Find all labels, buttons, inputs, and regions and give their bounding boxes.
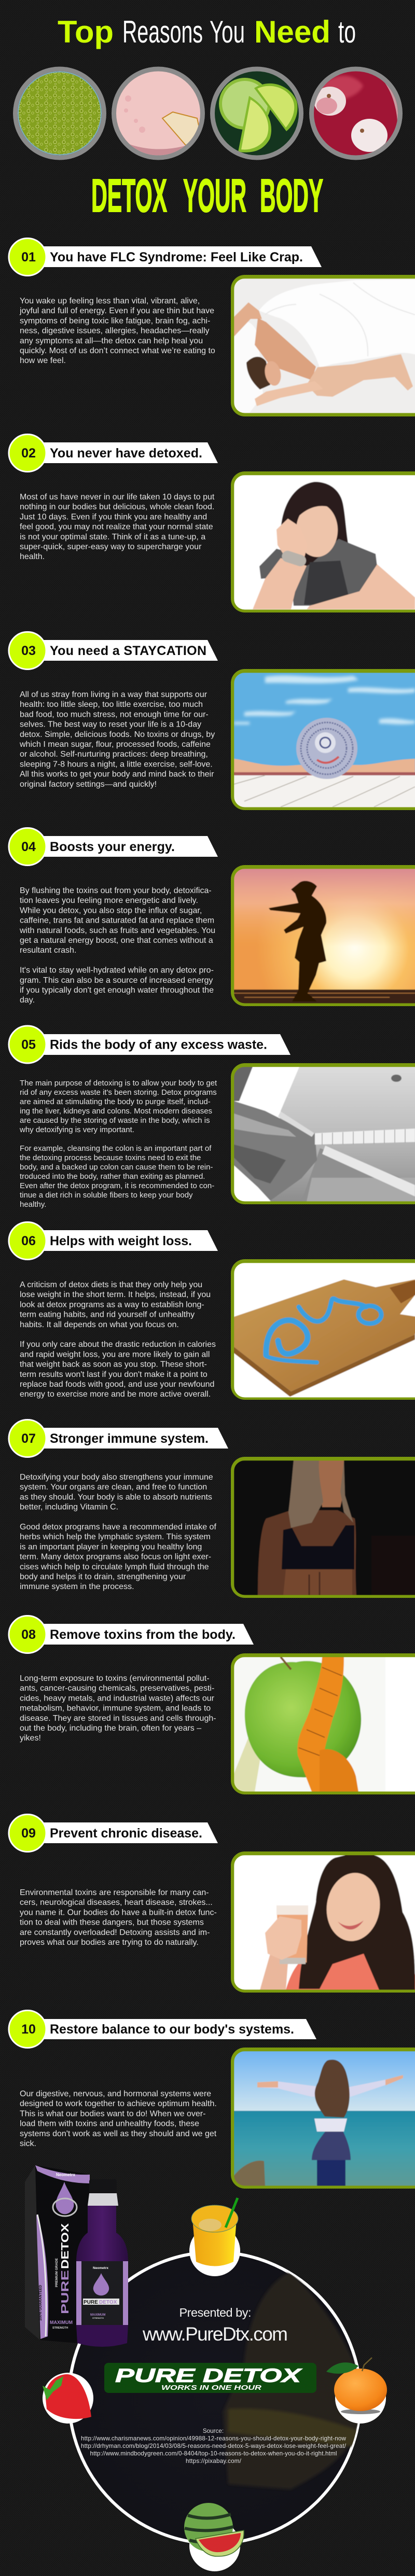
icon: strawberry bbox=[43, 2373, 93, 2424]
text 05: healthy. bbox=[20, 1200, 46, 1209]
text 04: It's vital to stay well-hydrated while on any detox pro- bbox=[20, 966, 214, 975]
box: PREMIUM GRADE bbox=[55, 2258, 59, 2287]
text 09: you name it. Our bodies do have a built-in detox func- bbox=[20, 1908, 217, 1917]
logo: pure detox: WORKS IN ONE HOUR bbox=[161, 2384, 262, 2391]
text 02 bbox=[20, 493, 215, 561]
photo: measuring tape around waist bbox=[231, 1063, 415, 1204]
heading 02: You never have detoxed. bbox=[50, 446, 202, 461]
text 01: joyful and full of energy. Even if you are thin but have bbox=[19, 307, 214, 315]
text 07 bbox=[20, 1473, 216, 1591]
faded lemon backdrop bbox=[223, 2272, 363, 2489]
text 07: body and helps it to drain, strengthening your bbox=[20, 1572, 186, 1581]
sources: https://pixabay.com/ bbox=[186, 2458, 242, 2464]
title: top reasons: Top bbox=[58, 15, 114, 49]
photo: woman sleeping under a duvet bbox=[231, 275, 415, 416]
text 02: feel good, you may not realize that your normal state bbox=[20, 523, 213, 532]
icon: orange bbox=[326, 2358, 387, 2424]
text 03 bbox=[19, 690, 215, 789]
title: top reasons bbox=[58, 15, 356, 49]
title: top reasons: to bbox=[338, 15, 356, 49]
heading 10: Restore balance to our body's systems. bbox=[50, 2022, 294, 2037]
text 07: Good detox programs have a recommended intake of bbox=[20, 1523, 216, 1531]
text 03: health: too little sleep, too little exercise, too much bbox=[20, 700, 203, 709]
heading 07 bbox=[9, 1420, 228, 1457]
photo circle: red juice bbox=[309, 66, 405, 160]
text: BODY bbox=[260, 170, 323, 222]
sources: http://drhyman.com/blog/2014/03/08/5-reasons-need-detox-5-ways-detox-lose-weight-feel-great/ bbox=[81, 2443, 347, 2449]
heading 06: 06 bbox=[21, 1234, 36, 1248]
sources: http://www.charismanews.com/opinion/49988-12-reasons-you-should-detox-your-body-right-now bbox=[81, 2435, 347, 2442]
text 08: out the body, including the brain, often for years – bbox=[20, 1724, 201, 1733]
text 10 bbox=[20, 2090, 217, 2148]
box bbox=[25, 2165, 90, 2344]
heading 05 bbox=[9, 1026, 290, 1063]
heading 06: Helps with weight loss. bbox=[50, 1234, 192, 1248]
heading 01 bbox=[9, 239, 322, 276]
text 09: Environmental toxins are responsible for many can- bbox=[20, 1888, 209, 1897]
text 06: energy to exercise more and be more active overall. bbox=[20, 1390, 211, 1399]
heading 02 bbox=[9, 435, 218, 472]
text 05: the detoxing process because toxins need to exit the bbox=[20, 1153, 201, 1162]
text 08 bbox=[20, 1674, 216, 1743]
bottle: MAXIMUM bbox=[90, 2314, 105, 2317]
section 04 bbox=[9, 828, 415, 1006]
bottle: STRENGTH bbox=[92, 2317, 104, 2319]
text 05: Even after the detox program, it is recommended to con- bbox=[20, 1181, 214, 1190]
photo circle: limes bbox=[210, 66, 303, 160]
heading 05: Rids the body of any excess waste. bbox=[50, 1037, 267, 1052]
text 03: detox. Simple, delicious foods. No toxins or drugs, by bbox=[20, 730, 215, 739]
heading 04: 04 bbox=[21, 840, 36, 854]
text 02: health. bbox=[20, 552, 45, 561]
text 02: Most of us have never in our life taken 10 days to put bbox=[20, 493, 215, 502]
text 02: nothing in our bodies but delicious, whole clean food. bbox=[20, 503, 214, 511]
text 06: term results won't last if you don't make it a point to bbox=[20, 1370, 208, 1379]
text 04: tion leaves you feeling more energetic and lively. bbox=[20, 896, 198, 905]
heading 04 bbox=[9, 828, 218, 865]
text 10: systems don't work as well as they should and we get bbox=[20, 2129, 217, 2138]
heading 01: You have FLC Syndrome: Feel Like Crap. bbox=[50, 250, 303, 264]
box: 100% GUARANTEED bbox=[39, 2285, 43, 2321]
heading 09: 09 bbox=[21, 1826, 36, 1841]
bottle bbox=[76, 2179, 128, 2347]
text 01: ness, digestive issues, allergies, headaches—really bbox=[20, 327, 210, 336]
presented by text: www.PureDtx.com bbox=[142, 2323, 288, 2345]
text 03: bad food, too much stress, not enough time for our- bbox=[20, 710, 209, 719]
text 04: get a natural energy boost, one that comes without a bbox=[20, 936, 213, 945]
text 10: This is what our bodies want to do! When we over- bbox=[20, 2109, 205, 2118]
section 08 bbox=[9, 1616, 415, 1794]
text 03: or alcohol. Self-nurturing practices: deep breathing, bbox=[20, 750, 208, 759]
text 05: For example, cleansing the colon is an important part of bbox=[20, 1144, 212, 1153]
heading 04: Boosts your energy. bbox=[50, 840, 175, 854]
section 01 bbox=[9, 239, 415, 416]
bottle: PURE bbox=[84, 2300, 98, 2305]
heading 03 bbox=[9, 632, 218, 669]
text 06: habits. It all depends on what you focus on. bbox=[20, 1320, 179, 1329]
sources: Source: bbox=[203, 2428, 224, 2434]
heading 07: Stronger immune system. bbox=[50, 1431, 209, 1446]
heading 06 bbox=[9, 1222, 218, 1259]
title: detox your body: YOUR bbox=[183, 170, 246, 222]
text 08: ants, cancer-causing chemicals, preservatives, pesti- bbox=[20, 1684, 214, 1693]
text 04: gram. This can also be a source of increased energy bbox=[20, 976, 213, 985]
text 10: designed to work together to achieve optimum health. bbox=[20, 2099, 217, 2108]
presented by text: Presented by: bbox=[179, 2306, 251, 2319]
heading 10 bbox=[9, 2010, 316, 2048]
text 05: ing the liver, kidneys and colons. Most modern diseases bbox=[20, 1107, 212, 1116]
text 04: While you detox, you also stop the influx of sugar, bbox=[20, 906, 202, 915]
text 07: immune system in the process. bbox=[20, 1582, 134, 1591]
text 08: metabolism, behavior, immune system, and leads to bbox=[20, 1704, 211, 1713]
text 02: super-quick, super-easy way to supercharge your bbox=[20, 542, 202, 551]
photo: silhouette at sunset bbox=[231, 865, 415, 1006]
photo: smiling woman with juice glass bbox=[231, 1851, 415, 1993]
box: PURE bbox=[60, 2270, 71, 2314]
text 05: are caused by the storing of waste in the body, which is bbox=[20, 1116, 210, 1125]
text 07: is an important player in keeping you healthy long bbox=[20, 1542, 202, 1551]
photo: green apple with orange tape bbox=[231, 1653, 415, 1794]
text 01 bbox=[19, 297, 215, 365]
text 01: quickly. Most of us don’t connect what we’re eating to bbox=[20, 346, 215, 355]
text 09 bbox=[20, 1888, 217, 1947]
text 07: better, including Vitamin C. bbox=[20, 1503, 118, 1512]
text 01: symptoms of being toxic like fatigue, brain fog, achi- bbox=[20, 316, 210, 325]
section 06 bbox=[9, 1222, 415, 1400]
logo: pure detox bbox=[104, 2363, 316, 2393]
text 03: which I mean sugar, flour, processed foods, caffeine bbox=[19, 740, 211, 749]
text 01: how we feel. bbox=[20, 356, 66, 365]
text 05 bbox=[19, 1079, 217, 1209]
text 05: troduced into the body, rather than exiting as planned. bbox=[20, 1172, 205, 1181]
text 07: term. Many detox programs also focus on light exer- bbox=[20, 1553, 211, 1562]
photo: bored young woman bbox=[231, 471, 415, 612]
text 02: is not your optimal state. Think of it as a tune-up, a bbox=[20, 533, 205, 541]
sources: http://www.mindbodygreen.com/0-8404/top-10-reasons-to-detox-when-you-do-it-right.html bbox=[90, 2450, 337, 2457]
photo: athletic woman on dark background bbox=[231, 1457, 415, 1598]
text 03: sleeping 7-8 hours a night, a little exercise, self-love. bbox=[20, 760, 213, 769]
text 03: All of us stray from living in a way that supports our bbox=[20, 690, 208, 699]
heading 07: 07 bbox=[21, 1431, 36, 1446]
bottle: Neometrx bbox=[93, 2266, 108, 2270]
text 01: any symptoms at all—the detox can help heal you bbox=[20, 337, 203, 345]
text 06: lose weight in the short term. It helps, instead, if you bbox=[20, 1290, 211, 1299]
text 03: All this works to get your body and mind back to their bbox=[20, 770, 214, 779]
text 05: why detoxifying is very important. bbox=[19, 1125, 134, 1134]
box: STRENGTH bbox=[52, 2327, 68, 2330]
photo circle: pink smoothie bbox=[112, 66, 205, 160]
product: box and bottle bbox=[25, 2165, 128, 2347]
box: DETOX bbox=[60, 2223, 71, 2269]
text 06: term eating habits, and rid yourself of unhealthy bbox=[20, 1311, 195, 1319]
text 06: and rapid weight loss, you are more likely to gain all bbox=[20, 1350, 210, 1359]
text 04: resultant crash. bbox=[20, 946, 76, 955]
section 09 bbox=[9, 1814, 415, 1993]
text 08: Long-term exposure to toxins (environmental pollut- bbox=[20, 1674, 210, 1683]
section 07 bbox=[9, 1420, 415, 1598]
text 04: if you typically don't get enough water throughout the bbox=[20, 986, 214, 995]
heading 10: 10 bbox=[21, 2022, 36, 2037]
text 10: Our digestive, nervous, and hormonal systems were bbox=[20, 2090, 211, 2098]
text 08: yikes! bbox=[20, 1734, 41, 1743]
text 02: Just 10 days. Even if you think you are healthy and bbox=[20, 512, 207, 521]
heading 09: Prevent chronic disease. bbox=[50, 1826, 202, 1841]
text 07: cises which help to circulate lymph fluid through the bbox=[20, 1563, 209, 1571]
text 06 bbox=[20, 1280, 216, 1399]
text 05: The main purpose of detoxing is to allow your body to get bbox=[20, 1079, 217, 1088]
heading 05: 05 bbox=[21, 1037, 36, 1052]
heading 08: 08 bbox=[21, 1627, 36, 1642]
bottle: DETOX bbox=[99, 2300, 117, 2305]
text 06: replace bad foods with good, and use your newfound bbox=[20, 1380, 214, 1389]
section 03 bbox=[9, 632, 415, 810]
text 08: cides, heavy metals, and industrial waste) affects our bbox=[20, 1694, 215, 1703]
text 08: disease. They are stored in tissues and cells through- bbox=[20, 1714, 216, 1723]
text 05: tinue a diet rich in soluble fibers to keep your body bbox=[20, 1191, 193, 1200]
text 04: caffeine, trans fat and saturated fat and replace them bbox=[20, 916, 214, 925]
title: detox your body: DETOX bbox=[91, 170, 167, 222]
text 09: tion to deal with these dangers, but those systems bbox=[20, 1918, 204, 1927]
photo: blue tape on cutting board bbox=[231, 1259, 415, 1400]
section 10 bbox=[9, 2010, 415, 2189]
text 06: If you only care about the drastic reduction in calories bbox=[20, 1340, 216, 1349]
sources bbox=[81, 2428, 347, 2464]
text 03: original factory settings—and quickly! bbox=[20, 780, 157, 789]
box: Neometrx bbox=[56, 2173, 75, 2177]
text 03: selves. The best way to reset your life is a 10-day bbox=[20, 720, 201, 729]
photo circle: green juice bbox=[13, 66, 106, 160]
text 10: load them with toxins and unhealthy foods, these bbox=[20, 2120, 199, 2128]
heading 03: 03 bbox=[21, 644, 36, 658]
text 06: look at detox programs as a way to establish long- bbox=[20, 1300, 204, 1309]
text 09: are constantly overloaded! Detoxing assists and im- bbox=[20, 1928, 210, 1937]
text 04: By flushing the toxins out from your body, detoxifica- bbox=[20, 886, 212, 895]
text 05: body, and a backed up colon can cause them to be rein- bbox=[20, 1163, 213, 1172]
text 07: Detoxifying your body also strengthens your immune bbox=[20, 1473, 213, 1482]
presented by text bbox=[142, 2306, 288, 2345]
title: top reasons: Need bbox=[254, 15, 330, 49]
text 04 bbox=[19, 886, 215, 1005]
title: top reasons: Reasons bbox=[122, 15, 203, 49]
heading 09 bbox=[9, 1814, 218, 1851]
heading 01: 01 bbox=[21, 250, 36, 264]
text 09: cers, neurological diseases, heart disease, strokes... bbox=[20, 1898, 213, 1907]
text 09: proves what our bodies are trying to do naturally. bbox=[20, 1938, 199, 1947]
text 05: are aimed at stimulating the body to purge itself, includ- bbox=[20, 1097, 211, 1106]
heading 08 bbox=[9, 1616, 254, 1653]
icon: juice glass bbox=[189, 2198, 240, 2276]
heading 02: 02 bbox=[21, 446, 36, 461]
text 04: day. bbox=[20, 996, 35, 1005]
text 07: as they should. Your body is able to absorb nutrients bbox=[20, 1493, 212, 1501]
photo: woman in hat at pool edge bbox=[231, 669, 415, 810]
title: top reasons: You bbox=[210, 15, 245, 49]
text 06: that weight back as soon as you stop. These short- bbox=[20, 1360, 207, 1369]
text 01: You wake up feeling less than vital, vibrant, alive, bbox=[20, 297, 200, 305]
logo: pure detox: PURE DETOX bbox=[115, 2365, 302, 2386]
icon: watermelon bbox=[184, 2503, 244, 2571]
heading 03: You need a STAYCATION bbox=[50, 644, 206, 658]
text 10: sick. bbox=[20, 2139, 36, 2148]
text 07: system. Your organs are clean, and free to function bbox=[20, 1483, 207, 1492]
text 04: with natural foods, such as fruits and vegetables. You bbox=[19, 926, 215, 935]
text 05: rid of any excess waste it's been storing. Detox programs bbox=[20, 1088, 217, 1097]
section 05 bbox=[9, 1026, 415, 1209]
title: detox your body bbox=[91, 170, 323, 222]
heading 08: Remove toxins from the body. bbox=[50, 1627, 236, 1642]
text 07: herbs which help the lymphatic system. This system bbox=[20, 1533, 211, 1541]
text 06: A criticism of detox diets is that they only help you bbox=[20, 1280, 202, 1289]
section 02 bbox=[9, 435, 415, 612]
photo: woman with open arms by the sea bbox=[231, 2048, 415, 2189]
box: MAXIMUM bbox=[50, 2320, 73, 2325]
circle panel: presented by bbox=[43, 2198, 387, 2571]
